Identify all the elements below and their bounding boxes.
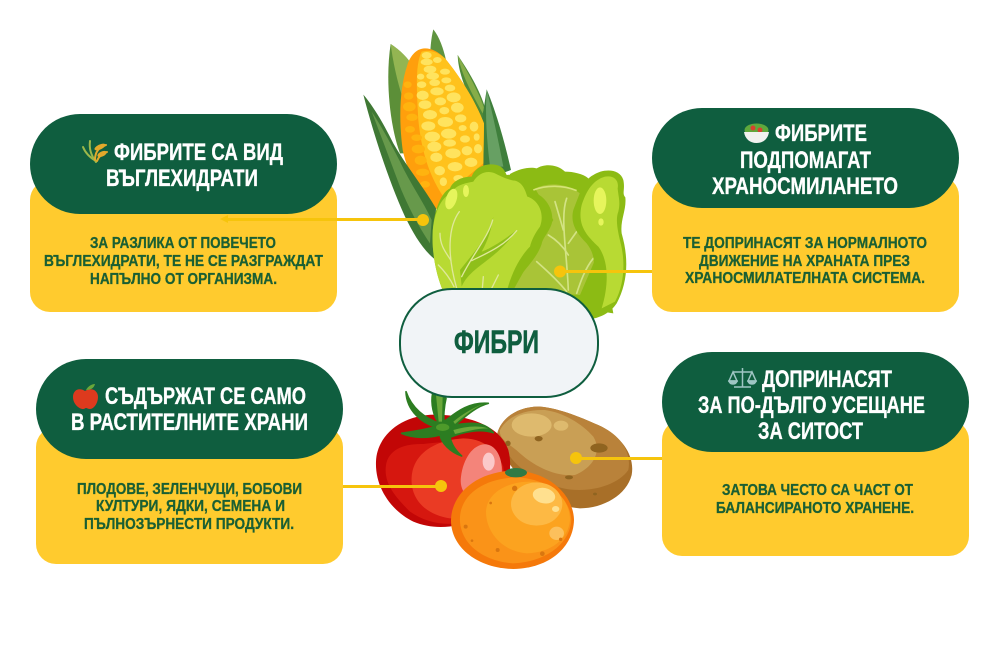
text block: ДВИЖЕНИЕ НА ХРАНАТА ПРЕЗ: [699, 253, 910, 270]
panel: digestion: [652, 108, 959, 312]
heading: ПОДПОМАГАТ: [740, 147, 871, 174]
heading: ЗА СИТОСТ: [758, 418, 863, 445]
icon: wheat: [83, 141, 108, 162]
icon: scales: [729, 368, 756, 387]
illustration: corn: [363, 29, 511, 259]
orange: [451, 468, 574, 569]
text block: КУЛТУРИ, ЯДКИ, СЕМЕНА И: [96, 498, 285, 515]
text block: ТЕ ДОПРИНАСЯТ ЗА НОРМАЛНОТО: [683, 235, 927, 252]
text block: БАЛАНСИРАНОТО ХРАНЕНЕ.: [716, 500, 914, 517]
text block: НАПЪЛНО ОТ ОРГАНИЗМА.: [90, 271, 277, 288]
panel: satiety: [662, 352, 969, 556]
central label: fibre: ФИБРИ: [454, 324, 539, 360]
icon: apple: [73, 384, 98, 409]
heading: ХРАНОСМИЛАНЕТО: [712, 173, 898, 200]
heading: ФИБРИТЕ: [775, 120, 867, 147]
heading: ЗА ПО-ДЪЛГО УСЕЩАНЕ: [698, 392, 925, 419]
text block: ЗА РАЗЛИКА ОТ ПОВЕЧЕТО: [90, 235, 276, 252]
illustration: lettuce: [433, 164, 626, 319]
text block: ХРАНОСМИЛАТЕЛНАТА СИСТЕМА.: [685, 270, 925, 287]
text block: ВЪГЛЕХИДРАТИ, ТЕ НЕ СЕ РАЗГРАЖДАТ: [44, 253, 323, 270]
heading: ВЪГЛЕХИДРАТИ: [106, 165, 258, 192]
heading: ФИБРИТЕ СА ВИД: [114, 139, 283, 166]
connector: digestion to lettuce: [554, 266, 652, 278]
panel: plant foods: [36, 359, 343, 564]
heading: В РАСТИТЕЛНИТЕ ХРАНИ: [71, 409, 308, 436]
illustration: tomato, potato and orange: [376, 392, 632, 569]
connector: plant foods to tomato: [343, 480, 447, 492]
central label: fibre: [400, 289, 598, 397]
connector: carbohydrates to corn: [220, 214, 429, 226]
connector: satiety to potato: [570, 452, 662, 464]
tomato: [376, 392, 510, 527]
text block: ПЪЛНОЗЪРНЕСТИ ПРОДУКТИ.: [84, 516, 294, 533]
icon: salad bowl: [744, 124, 769, 143]
text block: ПЛОДОВЕ, ЗЕЛЕНЧУЦИ, БОБОВИ: [77, 481, 302, 498]
text block: ЗАТОВА ЧЕСТО СА ЧАСТ ОТ: [722, 482, 913, 499]
potato: [497, 407, 632, 508]
panel: carbohydrates: [30, 114, 337, 312]
heading: СЪДЪРЖАТ СЕ САМО: [105, 383, 306, 410]
heading: ДОПРИНАСЯТ: [762, 366, 892, 393]
